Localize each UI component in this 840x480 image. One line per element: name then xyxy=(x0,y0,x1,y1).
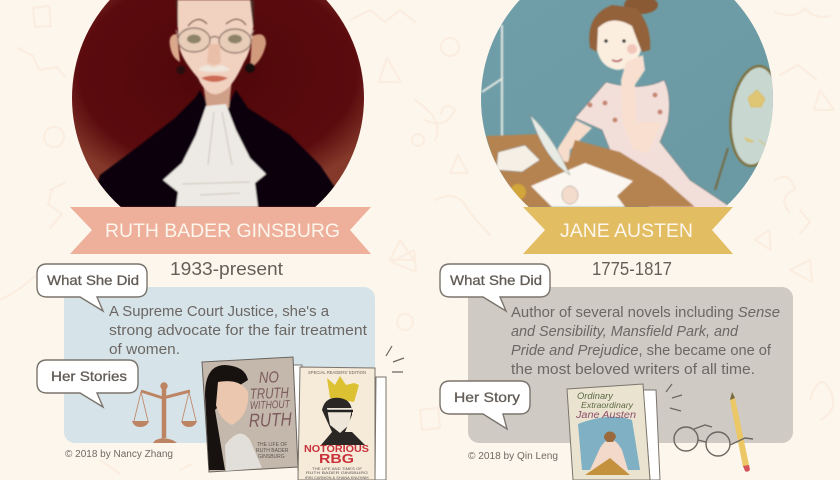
cover title xyxy=(304,444,369,466)
cover title xyxy=(248,369,292,432)
Ginsburg description: A Supreme Court Justice, she's a xyxy=(109,304,330,320)
cover face xyxy=(321,398,365,445)
paper xyxy=(531,163,633,207)
dress xyxy=(575,80,735,210)
ears xyxy=(170,34,180,62)
cover art xyxy=(578,417,640,470)
flowers on desk xyxy=(510,184,526,200)
sparks: Ginsburg book xyxy=(386,346,404,372)
Austen description: Pride and Prejudice, she became one of xyxy=(511,343,772,359)
cover subtitle: IRIN CARMON & SHANA KNIZHNIK xyxy=(305,475,369,480)
callout: What She Did (Ginsburg): What She Did xyxy=(47,272,139,288)
callout: What She Did (Austen): What She Did xyxy=(450,272,542,288)
copyright: Qin Leng: © 2018 by Qin Leng xyxy=(468,451,558,462)
Ginsburg description: strong advocate for the fair treatment xyxy=(109,323,367,339)
book: Notorious RBG xyxy=(298,367,386,480)
neck xyxy=(202,84,232,110)
panel: Ginsburg xyxy=(64,287,375,443)
Austen description: and Sensibility, Mansfield Park, and xyxy=(511,324,739,340)
robe xyxy=(90,90,340,207)
cover title: Extraordinary xyxy=(581,400,634,410)
cover subtitle: RUTH BADER GINSBURG xyxy=(306,470,368,475)
book: No Truth Without Ruth xyxy=(202,357,302,472)
cover title: TRUTH xyxy=(250,385,289,403)
panel: Austen xyxy=(468,287,793,443)
icon: glasses xyxy=(674,425,753,456)
cover title: NOTORIOUS xyxy=(304,444,369,455)
book: Notorious RBG: SPECIAL READERS' EDITION xyxy=(308,370,366,375)
name: RUTH BADER GINSBURG xyxy=(105,220,340,242)
cover title: RUTH xyxy=(248,410,292,432)
cover portrait xyxy=(205,365,248,470)
cover title: RBG xyxy=(319,451,354,466)
window frame xyxy=(482,24,504,136)
book: Ordinary Extraordinary Jane Austen xyxy=(567,384,660,480)
cover title: Jane Austen xyxy=(575,410,636,421)
face xyxy=(178,0,253,94)
callout: Her Stories: Her Stories xyxy=(51,368,127,384)
cover subtitle: GINSBURG xyxy=(258,454,285,460)
cover subtitle xyxy=(256,442,289,460)
hair xyxy=(176,0,254,28)
dates: Ginsburg: 1933-present xyxy=(170,259,283,279)
cover title: Ordinary xyxy=(577,391,614,401)
Austen description: Author of several novels including Sense xyxy=(511,305,780,321)
Ginsburg description xyxy=(109,304,367,358)
mirror stand xyxy=(715,148,728,190)
cover crown xyxy=(327,376,359,402)
name: JANE AUSTEN xyxy=(560,220,693,242)
earrings xyxy=(176,66,186,74)
hair xyxy=(589,5,650,52)
face xyxy=(597,20,641,70)
eyebrows xyxy=(188,19,246,26)
callout: What She Did (Ginsburg) xyxy=(37,264,147,311)
cover subtitle: RUTH BADER xyxy=(256,448,289,454)
sparks: Austen book xyxy=(666,384,682,411)
facial features xyxy=(604,39,608,43)
callout: What She Did (Austen) xyxy=(440,264,550,311)
cover title: NO xyxy=(259,369,279,387)
portrait: Ruth Bader Ginsburg xyxy=(70,0,366,207)
cover title xyxy=(575,391,636,421)
banner: Jane Austen xyxy=(523,207,733,254)
Ginsburg description: of women. xyxy=(109,342,180,358)
cover subtitle: THE LIFE AND TIMES OF xyxy=(312,466,363,471)
Austen description: the most beloved writers of all time. xyxy=(511,362,755,378)
Austen description xyxy=(511,305,780,378)
quill xyxy=(530,115,570,175)
banner: Ruth Bader Ginsburg xyxy=(70,207,371,254)
mirror xyxy=(728,64,773,168)
arm xyxy=(621,55,662,154)
nose and mouth xyxy=(207,44,221,65)
callout: Her Story: Her Story xyxy=(454,389,520,405)
dates: Austen: 1775-1817 xyxy=(592,259,672,279)
copyright: Nancy Zhang: © 2018 by Nancy Zhang xyxy=(65,449,173,460)
icon: pencil xyxy=(730,392,750,472)
cover title: WITHOUT xyxy=(250,399,291,412)
eyes xyxy=(187,34,201,44)
cover subtitle xyxy=(305,466,369,480)
callout: Her Story xyxy=(440,381,530,429)
cover subtitle: THE LIFE OF xyxy=(257,442,287,448)
hand xyxy=(562,186,578,204)
portrait: Jane Austen xyxy=(478,0,784,210)
callout: Her Stories xyxy=(37,360,138,407)
hair bun xyxy=(624,0,658,14)
icon: scales of justice xyxy=(132,383,197,443)
jabot xyxy=(163,104,266,207)
desk xyxy=(486,134,695,207)
dress flowers xyxy=(588,92,662,122)
glasses xyxy=(176,28,254,53)
